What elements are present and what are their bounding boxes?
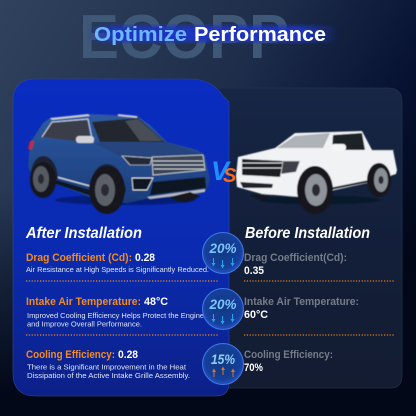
metric: intake air temperature after: Intake Air Temperature:: [26, 296, 141, 308]
badge: 20% drag reduction: [202, 232, 244, 274]
VS badge: S: [223, 165, 237, 187]
VS badge: V: [211, 156, 231, 186]
metric: cooling efficiency after: 0.28: [118, 349, 138, 361]
metric: intake air temperature after: and Improve Overall Performance.: [27, 320, 142, 328]
metric: intake air temperature after: 48°C: [144, 296, 168, 308]
badge: 20% temperature reduction: [202, 288, 244, 330]
metric: intake air temperature before: 60°C: [244, 309, 268, 321]
metric: cooling efficiency before: 70%: [244, 362, 263, 374]
front wheel: [89, 164, 126, 214]
VS badge: [211, 156, 237, 187]
metric: intake air temperature after: Improved Cooling Efficiency Helps Protect the Engine: [27, 311, 204, 320]
metric: cooling efficiency after: Dissipation of the Active Intake Grille Assembly.: [27, 371, 190, 380]
heading: before installation: Before Installation: [245, 225, 370, 242]
panel: after installation background: [13, 79, 229, 396]
heading: after installation: After Installation: [25, 225, 142, 242]
title: [88, 24, 338, 46]
metric: cooling efficiency after: There is a Significant Improvement in the Heat: [27, 362, 186, 372]
watermark: ECOPP: ECOPP: [79, 3, 289, 72]
metric: drag coefficient before: [244, 252, 347, 277]
metric: drag coefficient after: [26, 252, 209, 274]
image: white pickup truck: [236, 131, 397, 214]
badge: 20% drag reduction: 20%: [209, 240, 237, 256]
title: Performance: [194, 24, 326, 46]
rear wheel: [367, 163, 391, 197]
badge: 15% cooling improvement: [202, 344, 244, 384]
windshield: [277, 133, 330, 148]
side windows: [42, 120, 91, 143]
metric: cooling efficiency after: Cooling Efficiency:: [26, 349, 115, 361]
grille: [242, 159, 283, 177]
image: blue SUV: [28, 114, 210, 214]
windshield: [92, 118, 165, 142]
metric: intake air temperature before: Intake Air Temperature:: [244, 296, 359, 308]
side windows: [332, 133, 365, 150]
hood: [93, 142, 205, 157]
metric: drag coefficient before: Drag Coefficient(Cd):: [244, 252, 347, 264]
badge: 15% cooling improvement: 15%: [211, 351, 235, 367]
metric: cooling efficiency after: [26, 349, 190, 380]
metric: drag coefficient after: Drag Coefficient (Cd):: [26, 252, 132, 264]
metric: cooling efficiency before: [244, 349, 333, 374]
rear wheel: [30, 156, 58, 198]
metric: drag coefficient before: 0.35: [244, 265, 264, 277]
metric: drag coefficient after: 0.28: [135, 252, 155, 264]
metric: drag coefficient after: Air Resistance at High Speeds is Significantly Reduced.: [26, 265, 209, 274]
badge: 20% temperature reduction: 20%: [209, 296, 237, 312]
metric: intake air temperature after: [26, 296, 204, 328]
metric: intake air temperature before: [244, 296, 359, 321]
metric: cooling efficiency before: Cooling Efficiency:: [244, 349, 333, 361]
panel: before installation background: [210, 88, 402, 388]
title: Optimize: [94, 24, 187, 46]
front wheel: [297, 166, 333, 214]
